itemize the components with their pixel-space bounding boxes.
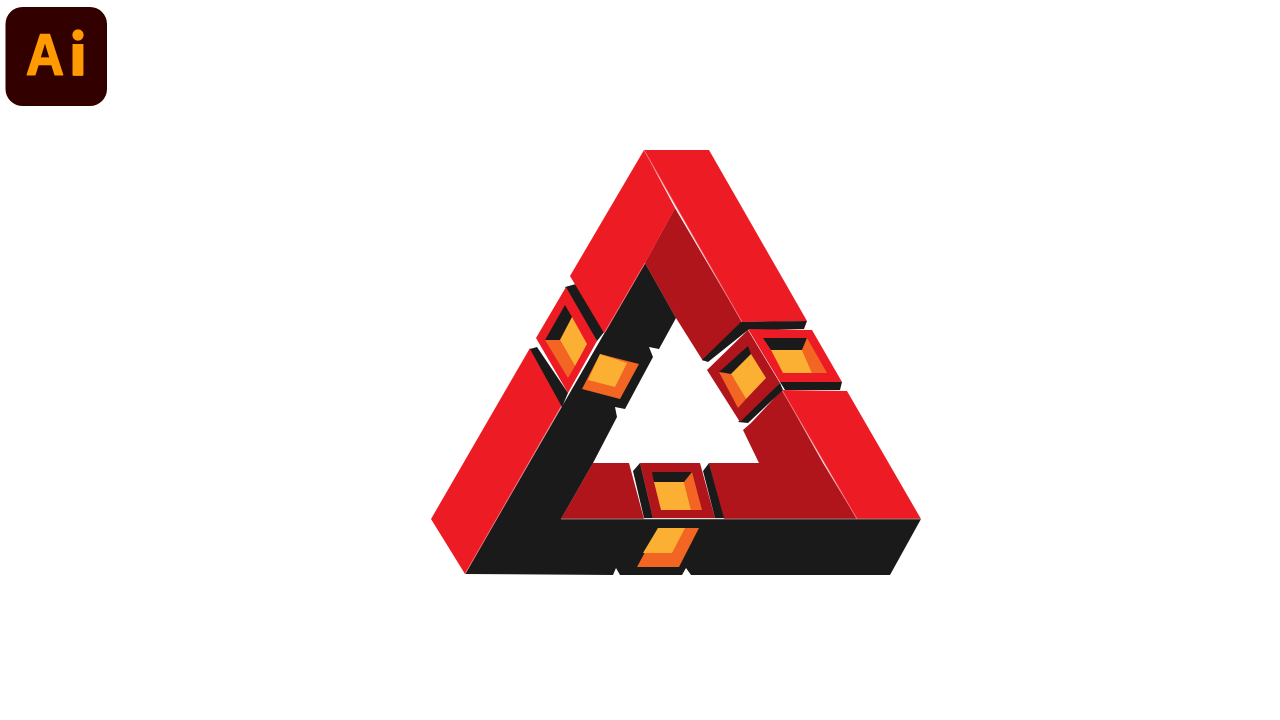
bottom joint: dark red frame — [640, 463, 715, 518]
bright red face: top right — [644, 150, 807, 322]
bright red face: top left — [570, 150, 675, 333]
bottom joint: orange block on black face — [637, 528, 699, 567]
left joint: lower black band — [530, 347, 568, 407]
left joint: orange block on black face — [582, 354, 639, 399]
left joint: upper black band — [565, 284, 605, 341]
impossible triangle illustration — [431, 150, 921, 575]
left joint: red diamond frame with opening — [536, 287, 597, 393]
right joint: bright red square frame — [748, 329, 842, 382]
right joint: black bands — [702, 321, 842, 423]
icon: Adobe Illustrator logo: i — [69, 23, 87, 88]
edge highlights — [465, 150, 921, 574]
right joint: dark red diamond frame — [707, 330, 780, 422]
dark red face: bottom beam right — [709, 463, 857, 519]
bottom joint: black bands — [633, 463, 724, 518]
dark red face: right beam underside — [743, 390, 823, 463]
black face: left and bottom beams — [465, 263, 921, 575]
icon: Adobe Illustrator logo — [6, 7, 107, 106]
dark red face: top beam underside — [645, 208, 742, 361]
icon: Adobe Illustrator logo: A — [26, 23, 64, 88]
bright red face: lower left — [431, 348, 562, 574]
bright red face: lower right — [782, 390, 921, 519]
dark red face: bottom beam left — [561, 463, 644, 519]
